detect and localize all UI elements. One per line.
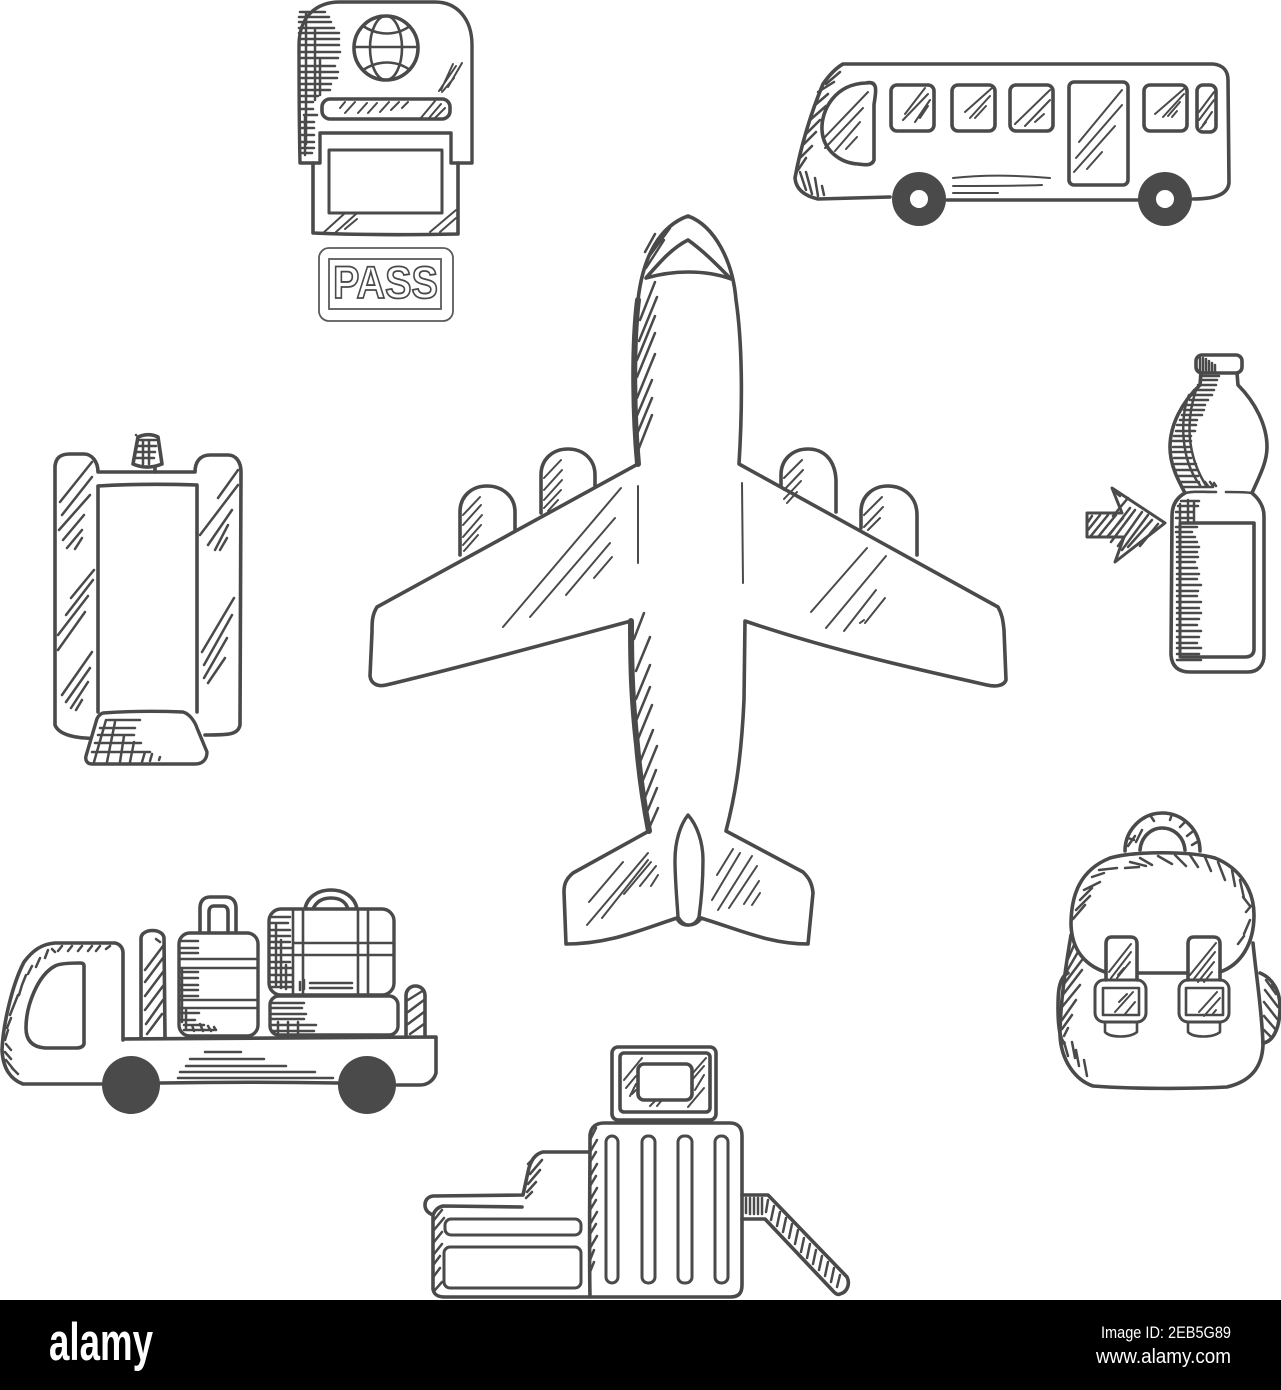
bottle cap [1196, 355, 1242, 373]
passport lower page [313, 163, 458, 235]
icon: water bottle with arrow [1087, 355, 1267, 672]
monitor [612, 1047, 716, 1120]
icon: baggage x-ray scanner [425, 1047, 848, 1297]
engines [460, 449, 917, 555]
truck cab and bed [2, 943, 436, 1085]
bus body [795, 64, 1229, 200]
icon: airplane [370, 216, 1006, 944]
top handle [1125, 813, 1200, 851]
globe [354, 16, 418, 80]
conveyor housing [425, 1152, 590, 1297]
flat suitcase [270, 996, 398, 1035]
icon: airport bus [795, 64, 1229, 226]
large suitcase [269, 890, 394, 995]
bottle body [1170, 373, 1267, 672]
exit ramp [742, 1195, 848, 1294]
straps and buckles [1095, 937, 1229, 1036]
floor mat [86, 711, 207, 764]
scanner main unit [590, 1123, 742, 1297]
passport title bar [322, 99, 450, 119]
alamy logo: alamy [49, 1313, 153, 1372]
body [1060, 935, 1263, 1088]
fuselage and wings outline [370, 216, 1006, 944]
passport cover [299, 2, 472, 163]
wheels [102, 1056, 396, 1114]
upright suitcase [179, 897, 258, 1036]
bus windows [822, 82, 1216, 185]
side pockets [1260, 973, 1280, 1043]
cockpit windshield [646, 240, 731, 279]
icon: backpack [1058, 813, 1280, 1088]
image id: Image ID: 2EB5G89 [1101, 1323, 1231, 1342]
pass ticket: PASS [333, 257, 438, 308]
website: www.alamy.com [1095, 1346, 1231, 1368]
wheels [892, 172, 1192, 226]
flap [1071, 853, 1254, 973]
icon: metal detector gate [55, 435, 241, 764]
icon: luggage truck [2, 890, 436, 1114]
pointing arrow [1087, 488, 1165, 562]
gate frame [55, 454, 241, 738]
fuselage shaded edge [631, 300, 649, 831]
cab window [26, 963, 84, 1048]
passport photo window [329, 150, 442, 213]
bottle label [1182, 523, 1254, 657]
icon: passport and pass [299, 2, 472, 321]
beacon [133, 435, 162, 472]
footer bar [0, 1300, 1281, 1390]
pass ticket [319, 248, 453, 321]
tail fin [675, 815, 703, 925]
rear posts [141, 930, 425, 1037]
